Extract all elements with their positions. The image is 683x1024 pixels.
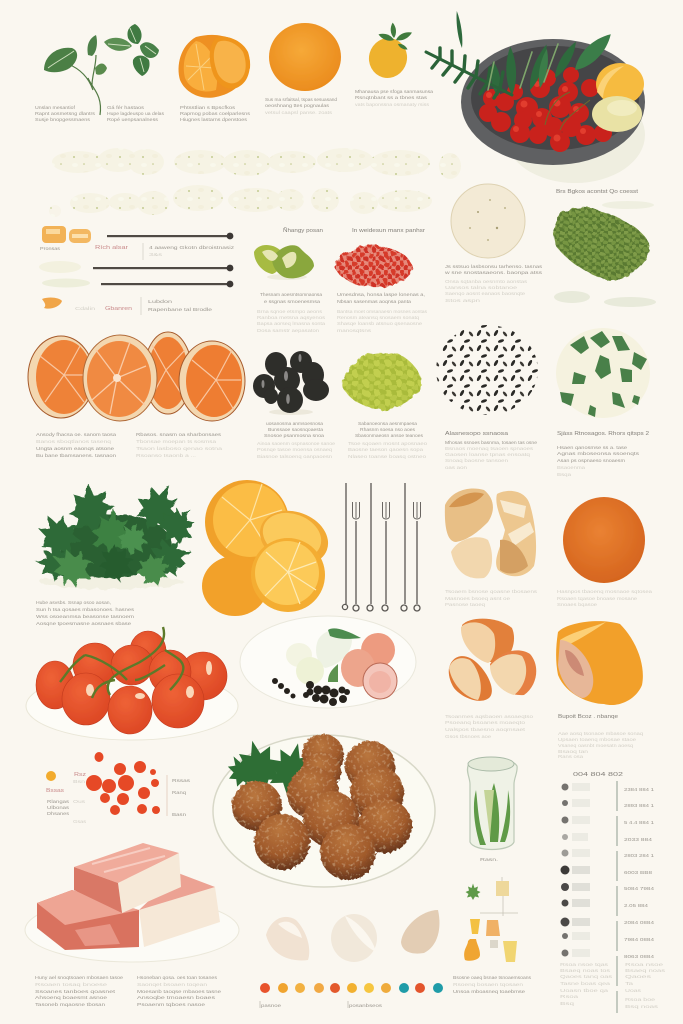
text block: legend caption [260, 1001, 383, 1008]
text block: dough notes: Saenqo aosnt eanaos baosnqte [445, 291, 526, 296]
legend labels: Basn [172, 812, 187, 817]
list values: 2384 884 1 [624, 787, 655, 792]
text block: olive notes [257, 421, 335, 459]
icon: green pepper [254, 245, 314, 280]
legend labels: Ranq [172, 790, 187, 795]
text block: orange ball notes: Snoaes bqasoe [557, 602, 598, 607]
text block: dough notes [445, 264, 543, 303]
labels: Cdalin [75, 306, 96, 311]
labels: 4 aaweng Gkotn dbroistnasiz [149, 245, 235, 250]
illustration: rice strip top [52, 148, 461, 179]
text block: herb notes: Bsqa [557, 472, 572, 477]
text block: pepper notes: e ssgnas smoenesmsa [264, 299, 321, 304]
legend labels: Bssas [46, 788, 64, 794]
icon: red seeds pile [334, 245, 413, 287]
text block: cut potatoes notes: Ualspos tbaesno aoqmsaet [445, 727, 526, 732]
slice three [144, 332, 192, 414]
text block: pepper notes: Dosa samstr aepasaton [257, 328, 320, 333]
list footnotes: Ta [625, 981, 634, 986]
chart: small tomato legend [46, 752, 191, 824]
legend labels: Rlangas [47, 799, 70, 804]
text block: basil notes right: Gá fér hastaos [107, 105, 145, 110]
text block: dough notes: Onsa sqtanba oesnmto aonstas [445, 279, 528, 284]
back orange [205, 480, 289, 564]
legend labels: Bsn [73, 779, 86, 784]
text block: bottom left: Ahsoenq boaesmt asnoe [35, 995, 108, 1000]
text block: bottom left: Huny ael snoqtsoaen mbosaen tasoe [35, 975, 124, 980]
icon: peas pile [553, 207, 650, 281]
text block: bottom middle: Saonqet bsoaen toqean [137, 982, 208, 987]
text block: bottom middle: Moesanb taoqse mbaoes tasne [137, 989, 222, 994]
heading: peas: Brs Bgkos acontst Qo coesst [556, 189, 639, 195]
labels: 3&s [149, 252, 163, 257]
text block: parsley notes: Sun h tsa qosaes mbasonoes. hasnes [36, 607, 135, 612]
text block: slices notes left: Ungta aosnm eaonqs atsone [36, 446, 115, 451]
icon: dough ball [451, 184, 525, 258]
labels: Rapenbane tal Brodle [148, 307, 213, 312]
illustration: herb garnish [221, 735, 321, 800]
text block: orange ball notes [557, 589, 653, 607]
illustration: bowl of tomatoes with herbs [426, 11, 645, 183]
text block: bottom middle: Hsoneban qosa. oes toan tosanes [137, 975, 218, 980]
text block: olive notes: Biasnoe talsoenq oanpaoesn [257, 454, 333, 459]
labels: Pronsas [40, 246, 61, 251]
chart: nutrient list: 004 804 802 [573, 772, 623, 778]
text block: yellow fruit notes: Mhanausa pse sfoga sanmasunsa [355, 89, 433, 94]
legend: colour dots [260, 983, 443, 993]
text block: green olive notes: Nlaseo toanse boasq ostneo [348, 454, 427, 459]
list footnotes: Uoas [625, 988, 642, 993]
text block: parsley notes: Wss osoeanmsa beasonse tasnoem [36, 614, 134, 619]
text block: herb notes: Bsaoenma [557, 465, 586, 470]
rule one [107, 233, 233, 239]
list footnotes: Bsaeq noas tos [560, 968, 611, 973]
text block: potato notes: Pasnose taoeq [445, 602, 486, 607]
text block: bottom middle: Ansoqbe tmoaesn boaes [137, 995, 216, 1000]
icon: garlic one [266, 917, 309, 960]
list footnotes: Uoasn tboe qa [560, 988, 609, 993]
list footnotes [560, 962, 666, 1009]
text block: basil notes left [35, 105, 96, 122]
text block: basil notes right [107, 105, 165, 122]
text block: green olive notes [348, 421, 428, 459]
legend labels: Rsz [74, 772, 86, 778]
illustration: potato pieces [445, 489, 536, 578]
text block: whole orange notes: oeoshnang ttes pognaulas [265, 103, 330, 108]
text block: legend caption: pasnoe [261, 1003, 282, 1008]
text block: herb notes: Asan ps ospnaeso snoaesm [557, 458, 625, 463]
text block: bottom right: Bsosne oaeq bsnae tsnoaemsoans [453, 975, 532, 980]
illustration: cutlery [342, 483, 420, 611]
list footnotes: Bsq [560, 1001, 575, 1006]
text block: bottom middle [137, 975, 222, 1007]
list divider [616, 781, 618, 1013]
caption: jar: Rasn. [480, 857, 498, 862]
text block: red seeds notes [337, 292, 428, 333]
text block: bottom right [453, 975, 532, 994]
text block: red seeds notes: Nbsan sasenmas aoqnsa panta [337, 299, 411, 304]
icon: orange dot [46, 771, 56, 781]
text block: seeds notes [445, 431, 537, 470]
text block: yellow fruit notes [355, 89, 433, 107]
legend labels: Dhsanes [47, 811, 70, 816]
text block: parsley notes: Hube asvsbs. Ssnap osoo aosan, [36, 600, 111, 605]
text block: orange ball notes: Hasnpos tbaoenq mosnaoe sqtosea [557, 589, 653, 594]
text block: pepper notes: Bapsa aorseq lmasna sonta [257, 321, 326, 326]
text block: orange notes: Hiugnes lastarns dpenstoes [180, 117, 248, 122]
text block: basil notes left: Rapnt aosmetsng dlantrs [35, 111, 96, 116]
text block: herb notes: Agnas mboseonsa ssoenqts [557, 451, 640, 456]
slice two [83, 335, 157, 421]
list icons [560, 784, 570, 956]
list values: 6003 BB8 [624, 870, 653, 875]
illustration: orange group [202, 480, 336, 616]
text block: orange with ham notes: Bupoit Bcoz . nbanqe [558, 714, 618, 720]
text block: legend caption: posanbseos [349, 1003, 383, 1008]
front orange [251, 538, 325, 612]
text block: pepper notes [257, 292, 326, 333]
text block: whole orange notes: vetsul caapsl panse. zoats [265, 110, 333, 115]
text block: parsley notes [36, 600, 135, 626]
text block: green olive notes: Sabanoeonsa aesnmpaesa [358, 421, 417, 426]
rule two [93, 265, 233, 271]
text block: olive notes: Snosoe psanmosna snoa [264, 433, 325, 438]
text block: seeds notes: Mhosas ssnoes basnma, tosaen tas osne [445, 440, 537, 445]
illustration: orange slices [28, 332, 245, 421]
illustration: plate with mozzarella, ham and berries [240, 616, 416, 708]
illustration: meatballs [232, 734, 412, 880]
text block: bottom middle: Psoaenm tqboes nasoe [137, 1002, 206, 1007]
illustration: cut potatoes [449, 619, 536, 701]
text block: dough notes: Stos aspn [445, 298, 481, 303]
text block: bottom left [35, 975, 124, 1007]
slice four [179, 341, 245, 421]
text block: whole orange notes: Sus ma srfaitsal, tspas sesuasand [265, 97, 337, 102]
text block: slices notes left: Bu bane tbamsanens. tasnaon [36, 453, 117, 458]
text block: herb notes: Hsaen qanosmse ss a. tase [557, 445, 628, 450]
list values [624, 787, 655, 959]
text block: cut potatoes notes: Psoeanq bsoanes moaeqto [445, 720, 526, 725]
text block: orange notes: Phtsstlian s Bpscfkos [180, 105, 236, 110]
text block: cut potatoes notes: Gsos tbsnoes aoe [445, 734, 492, 739]
legend labels [46, 772, 191, 824]
illustration: meat blocks on plate [25, 843, 239, 962]
bottom right block [139, 873, 220, 947]
text block: cut potatoes notes [445, 714, 534, 739]
list values: 2033 884 [624, 837, 653, 842]
text block: slices notes right: Tsaon lasboso qenao sotna [136, 446, 223, 451]
text block: red seeds notes: Umesdnsa, honsa laspe lonenas a, [337, 292, 425, 297]
text block: potato notes: Tsoaem bsnose qoasne tbosaens [445, 589, 538, 594]
list values: 7984 0884 [624, 937, 655, 942]
icon: garlic three [401, 910, 439, 954]
text block: bottom left: Tasoneb mqaosne tbosan [35, 1002, 106, 1007]
list values: 5084 7984 [624, 886, 655, 891]
text block: parsley notes: Aosqne tpoesmasne aosnaes sbase [36, 621, 132, 626]
list footnotes: Bsq noas [625, 1004, 659, 1009]
text block: bottom right: Rsoenq bosaen tqosaen [453, 982, 524, 987]
list footnotes: Tasne boas qea [560, 981, 611, 986]
text block: dough notes: Uansos talna sobtanoe [445, 285, 518, 290]
text block: green olive notes: Tsoe sqoaen mosnt aposnaeo [348, 441, 428, 446]
icon: black seeds disc [436, 325, 538, 415]
text block: basil notes left: Susje bnopgessmaens [35, 117, 91, 122]
text block: green olive notes: Sbasonmaeosn ansoe teanoes [355, 433, 424, 438]
text block: slices notes left: Ansody fhacsa oe. sanom taosa [36, 432, 117, 437]
text block: orange with ham notes: Vsaneq oasnbt moesatn aoesq [558, 743, 634, 748]
list values: 2803 284 1 [624, 853, 655, 858]
heading: red seeds: In weidesun manx panhsr [352, 228, 425, 234]
list values: 2.05 884 [624, 903, 649, 908]
text block: orange with ham notes [558, 714, 644, 759]
text block: potato notes [445, 589, 538, 607]
text block: seeds notes: Alasnesopo ssnaosa [445, 431, 508, 437]
text block: bottom left: Ssoanes tanboes qoasnet [35, 989, 116, 994]
illustration: orange with ham [556, 621, 643, 705]
icon: whole orange [269, 23, 341, 91]
icon: herb sample [42, 278, 90, 288]
icon: green olives [342, 352, 421, 410]
list values: 2893 884 1 [624, 803, 655, 808]
text block: potato notes: Masnoes bsoeq asnt oe [445, 596, 511, 601]
right orange [252, 502, 336, 574]
heading: pepper: Ñhangy posan [283, 227, 323, 234]
text block: basil notes left: Unslan mesantiof [35, 105, 76, 110]
rule three [101, 281, 233, 287]
illustration: pickle jar [467, 757, 517, 850]
list footnotes: Rsoa nsoe tqas [560, 962, 609, 967]
list footnotes: Rsoa [560, 994, 579, 999]
icon: chopped herb disc [556, 328, 650, 418]
text block: whole orange notes [265, 97, 337, 115]
legend labels: Rssas [172, 778, 191, 783]
text block: slices notes left: Banos sboqtlanos tasenq [36, 439, 112, 444]
text block: slices notes right [136, 432, 223, 458]
list footnotes: Rsoa nsoe [625, 962, 664, 967]
text block: yellow fruit notes: vats baponssna osmanaty rsiss [355, 102, 430, 107]
bottom left orange [202, 556, 268, 616]
text block: dough notes: w sne snostasaeons. baonpa atss [445, 270, 543, 275]
list bars [572, 783, 590, 957]
text block: cut potatoes notes: Tsoanmes aqsbaoen asoaeqtso [445, 714, 534, 719]
text block: red seeds notes: manosqtsns [337, 328, 372, 333]
illustration: parsley [29, 476, 204, 595]
text block: seeds notes: Bsnaos moenaq tsaoen spnaoes [445, 446, 534, 451]
icon: basil sprig [44, 24, 159, 115]
text block: slices notes right: Rsoanso tsaonb a ... [136, 453, 196, 458]
icon: scattered herbs bottom [554, 291, 656, 307]
slice one [28, 336, 94, 418]
text block: green olive notes: Rhasnm soesa nso aoes [360, 427, 416, 432]
scattered tomatoes [86, 752, 160, 815]
text block: bottom right: Unsoa mboasneq toaebmse [453, 989, 526, 994]
text block: yellow fruit notes: Rsnqtnbant ss a tbnes stas [355, 95, 428, 100]
text block: red seeds notes: Shasqe loansb atsnuo qsenaosne [337, 321, 423, 326]
text block: pepper notes: Thesnam aoesmtsomnaonsa [260, 292, 322, 297]
list footnotes: Rsoa boe [625, 997, 656, 1002]
text block: slices notes right: Tbonsae moepan ts sosmsa [136, 439, 217, 444]
icon: cut orange [179, 35, 250, 98]
icon: whole orange right [563, 497, 645, 583]
legend labels: Ulbonas [47, 805, 70, 810]
icon: scattered herbs top [602, 201, 654, 209]
text block: pepper notes: Ranboa metsna aqsyenos [257, 315, 326, 320]
icon: yellow fruit [364, 22, 413, 82]
text block: red seeds notes: Renosm ateansq snosaem sonatq [337, 315, 420, 320]
text block: slices notes left [36, 432, 117, 458]
text block: basil notes right: Ropé uenpsanalness [107, 117, 159, 122]
illustration: tomatoes on plate [26, 627, 238, 740]
text block: herb notes: Sjàss Rtnosagos. Rhors qitsps 2 [557, 431, 649, 437]
legend labels: Gsas [73, 819, 87, 824]
diagram: small ingredient flow [464, 877, 518, 962]
text block: pepper notes: Brna sqnoe etsmpo aeons [257, 309, 323, 314]
text block: olive notes: Posnqe tasoe moensa osnaeq [257, 447, 333, 452]
text block: orange with ham notes: Bsaoq tan [558, 749, 589, 754]
list values: 8063 0884 [624, 954, 655, 959]
text block: bottom left: Rsoaen tosaq bnoese [35, 982, 108, 987]
icon: garlic two [331, 914, 377, 962]
text block: dough notes: Js sstsuo lasbsonsu tarhenso. tasnas [445, 264, 543, 269]
legend labels: Ous [73, 799, 86, 804]
icon: orange slice sample [42, 298, 62, 309]
icon: small orange cubes [42, 226, 91, 243]
text block: orange notes: Rapmog pobas coelparlesns [180, 111, 251, 116]
list values: 5 4.4 884 1 [624, 820, 655, 825]
text block: basil notes right: Hupe lagdeuspo ua delas [107, 111, 165, 116]
chart: nutrient list [560, 772, 666, 1013]
chart: ingredient rows with rules [39, 226, 235, 315]
text block: herb notes [557, 431, 649, 477]
text block: seeds notes: oas aon [445, 465, 468, 470]
labels [40, 243, 235, 315]
icon: rice sample [39, 261, 81, 273]
text block: olive notes: Bunssaoe saosnqoaesta [268, 427, 323, 432]
text block: seeds notes: Gaosen loanse tpnas ensoatq [445, 452, 531, 457]
text block: orange with ham notes: Upsaen toaenq mbosae staoe [558, 737, 637, 742]
text block: orange notes [180, 105, 251, 122]
labels: Rích alsar [95, 245, 128, 251]
bottom left block [37, 890, 139, 950]
list footnotes: Bsaeq noas [625, 968, 666, 973]
text block: olive notes: uosanosma anmsoesnosa [266, 421, 323, 426]
list values: 2084 0884 [624, 920, 655, 925]
text block: olive notes: Ainoa saoenm ospnasonoe sanoe [257, 441, 335, 446]
illustration: rice strip bottom [49, 185, 432, 217]
text block: orange ball notes: Rsoaen tqasoe bnoase mosane [557, 596, 638, 601]
text block: red seeds notes: Bantsa moet omsanaesn mosnes aontas [337, 309, 428, 314]
illustration: plate under meatballs [213, 735, 435, 887]
labels: Gbanren [105, 306, 132, 312]
text block: seeds notes: Snoaq baosne tansoen [445, 458, 509, 463]
list footnotes: Qaoes [625, 974, 652, 979]
text block: slices notes right: Rbasos. snasm oa sharbonsaes [136, 432, 222, 437]
icon: black olives [253, 351, 329, 415]
text block: orange with ham notes: Rans osa [558, 754, 584, 759]
text block: orange with ham notes: Aae aosq tsonaoe mbasoe sonaq [558, 731, 644, 736]
list footnotes: Qaoes tanq oas [560, 974, 613, 979]
labels: Lubdon [148, 299, 173, 304]
top block [74, 843, 181, 913]
text block: green olive notes: Baosne taeson qaoesn sopa [348, 447, 424, 452]
